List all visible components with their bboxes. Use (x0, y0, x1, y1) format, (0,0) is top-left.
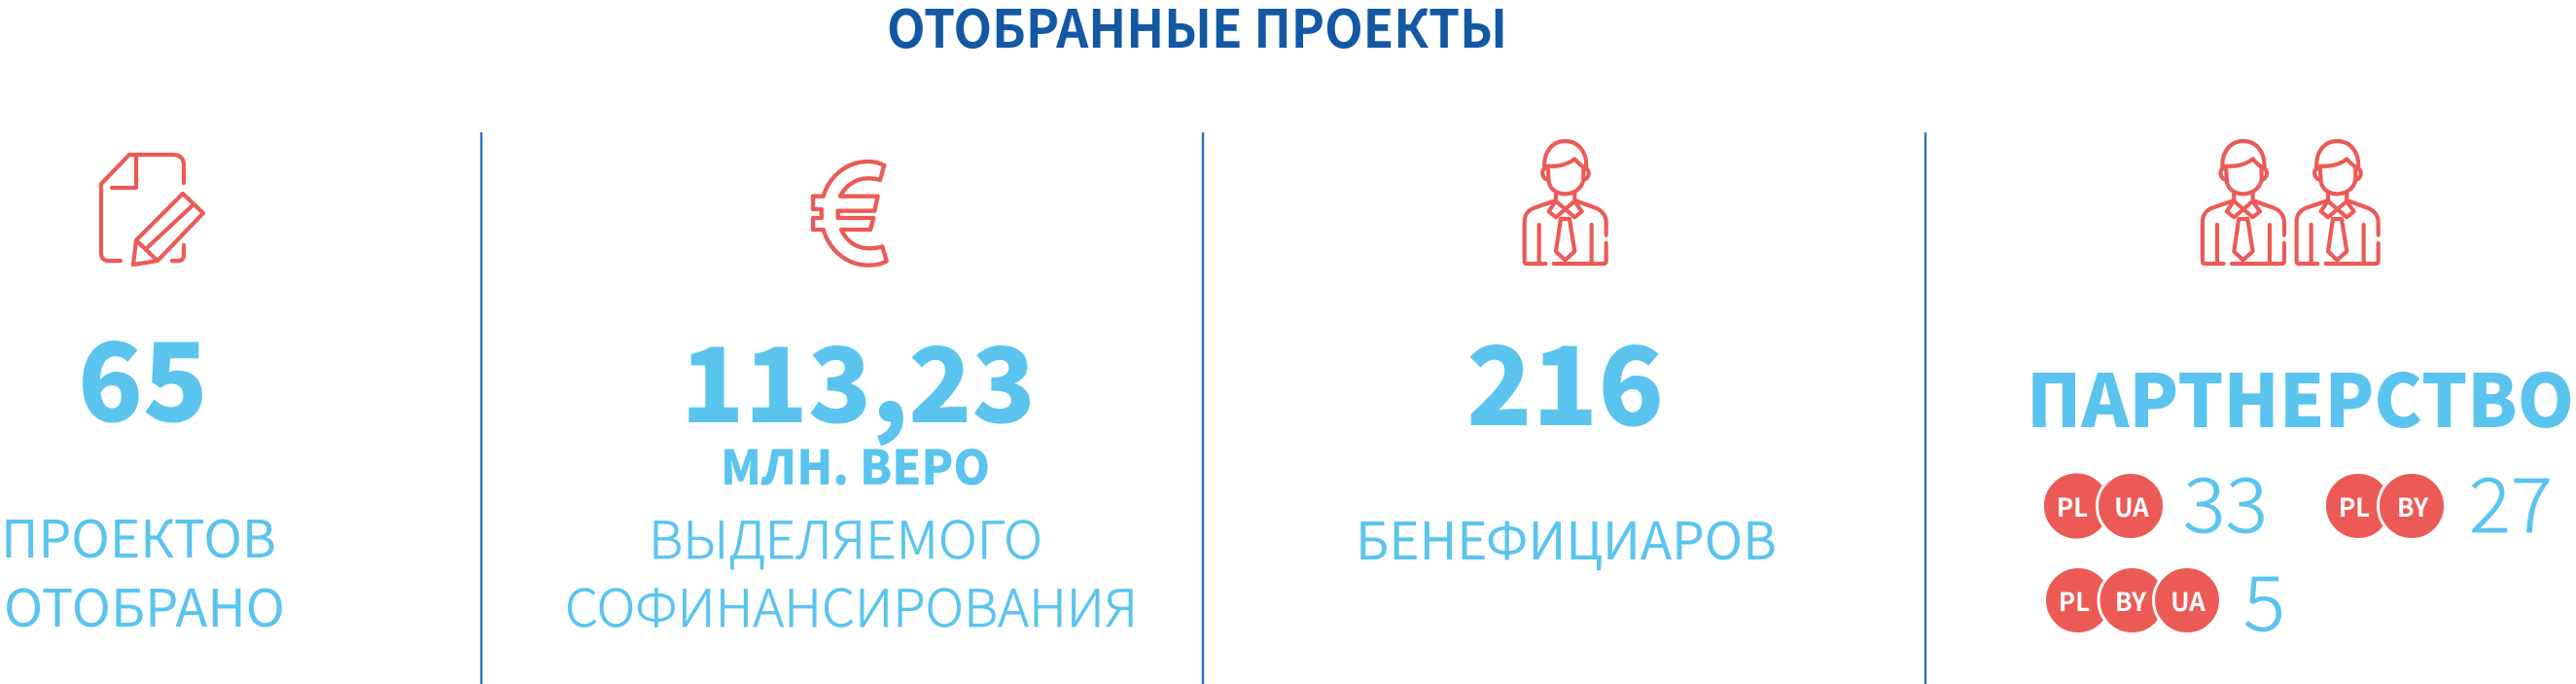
badges: PL-BY-UA: PL (2059, 583, 2090, 619)
badges: PL-BY (2324, 473, 2445, 539)
badges: PL-BY: PL (2339, 488, 2370, 524)
panel: beneficiaries (1356, 141, 1777, 575)
badges: PL-BY-UA (2044, 566, 2221, 634)
label: beneficiaries: БЕНЕФИЦИАРОВ (1356, 501, 1777, 575)
label: allocated co-financing: СОФИНАНСИРОВАНИЯ (565, 568, 1138, 642)
badges: PL-BY-UA: UA (2170, 583, 2205, 619)
label: projects selected: ПРОЕКТОВ (1, 499, 276, 573)
badges: PL-UA: UA (2114, 488, 2149, 524)
icon: document with pencil (101, 155, 203, 265)
badges: PL-UA (2042, 472, 2165, 540)
label: allocated co-financing (565, 500, 1138, 642)
number: 113,23: 113,23 (681, 302, 1036, 452)
count: PL-BY-UA 5: 5 (2243, 544, 2285, 653)
label: projects selected: ОТОБРАНО (4, 568, 285, 642)
heading: partnership: ПАРТНЕРСТВО (2027, 342, 2574, 449)
icon: person (1525, 141, 1606, 264)
badges: PL-UA: PL (2057, 488, 2088, 524)
badges: PL-BY-UA: BY (2115, 583, 2147, 619)
count: PL-UA 33: 33 (2183, 446, 2268, 555)
panel: projects selected (1, 155, 285, 642)
label: projects selected (1, 499, 285, 642)
panel: partnership (2027, 141, 2574, 653)
count: PL-BY 27: 27 (2469, 446, 2553, 555)
icon: two people (2203, 141, 2379, 264)
label: allocated co-financing: ВЫДЕЛЯЕМОГО (649, 500, 1042, 574)
number: 216: 216 (1466, 300, 1664, 457)
unit: million euro: МЛН. ВЕРО (721, 430, 990, 499)
panel: co-financing (565, 162, 1138, 642)
icon: euro (813, 162, 887, 266)
badges: PL-BY: BY (2397, 488, 2429, 524)
number: 65: 65 (78, 296, 208, 453)
